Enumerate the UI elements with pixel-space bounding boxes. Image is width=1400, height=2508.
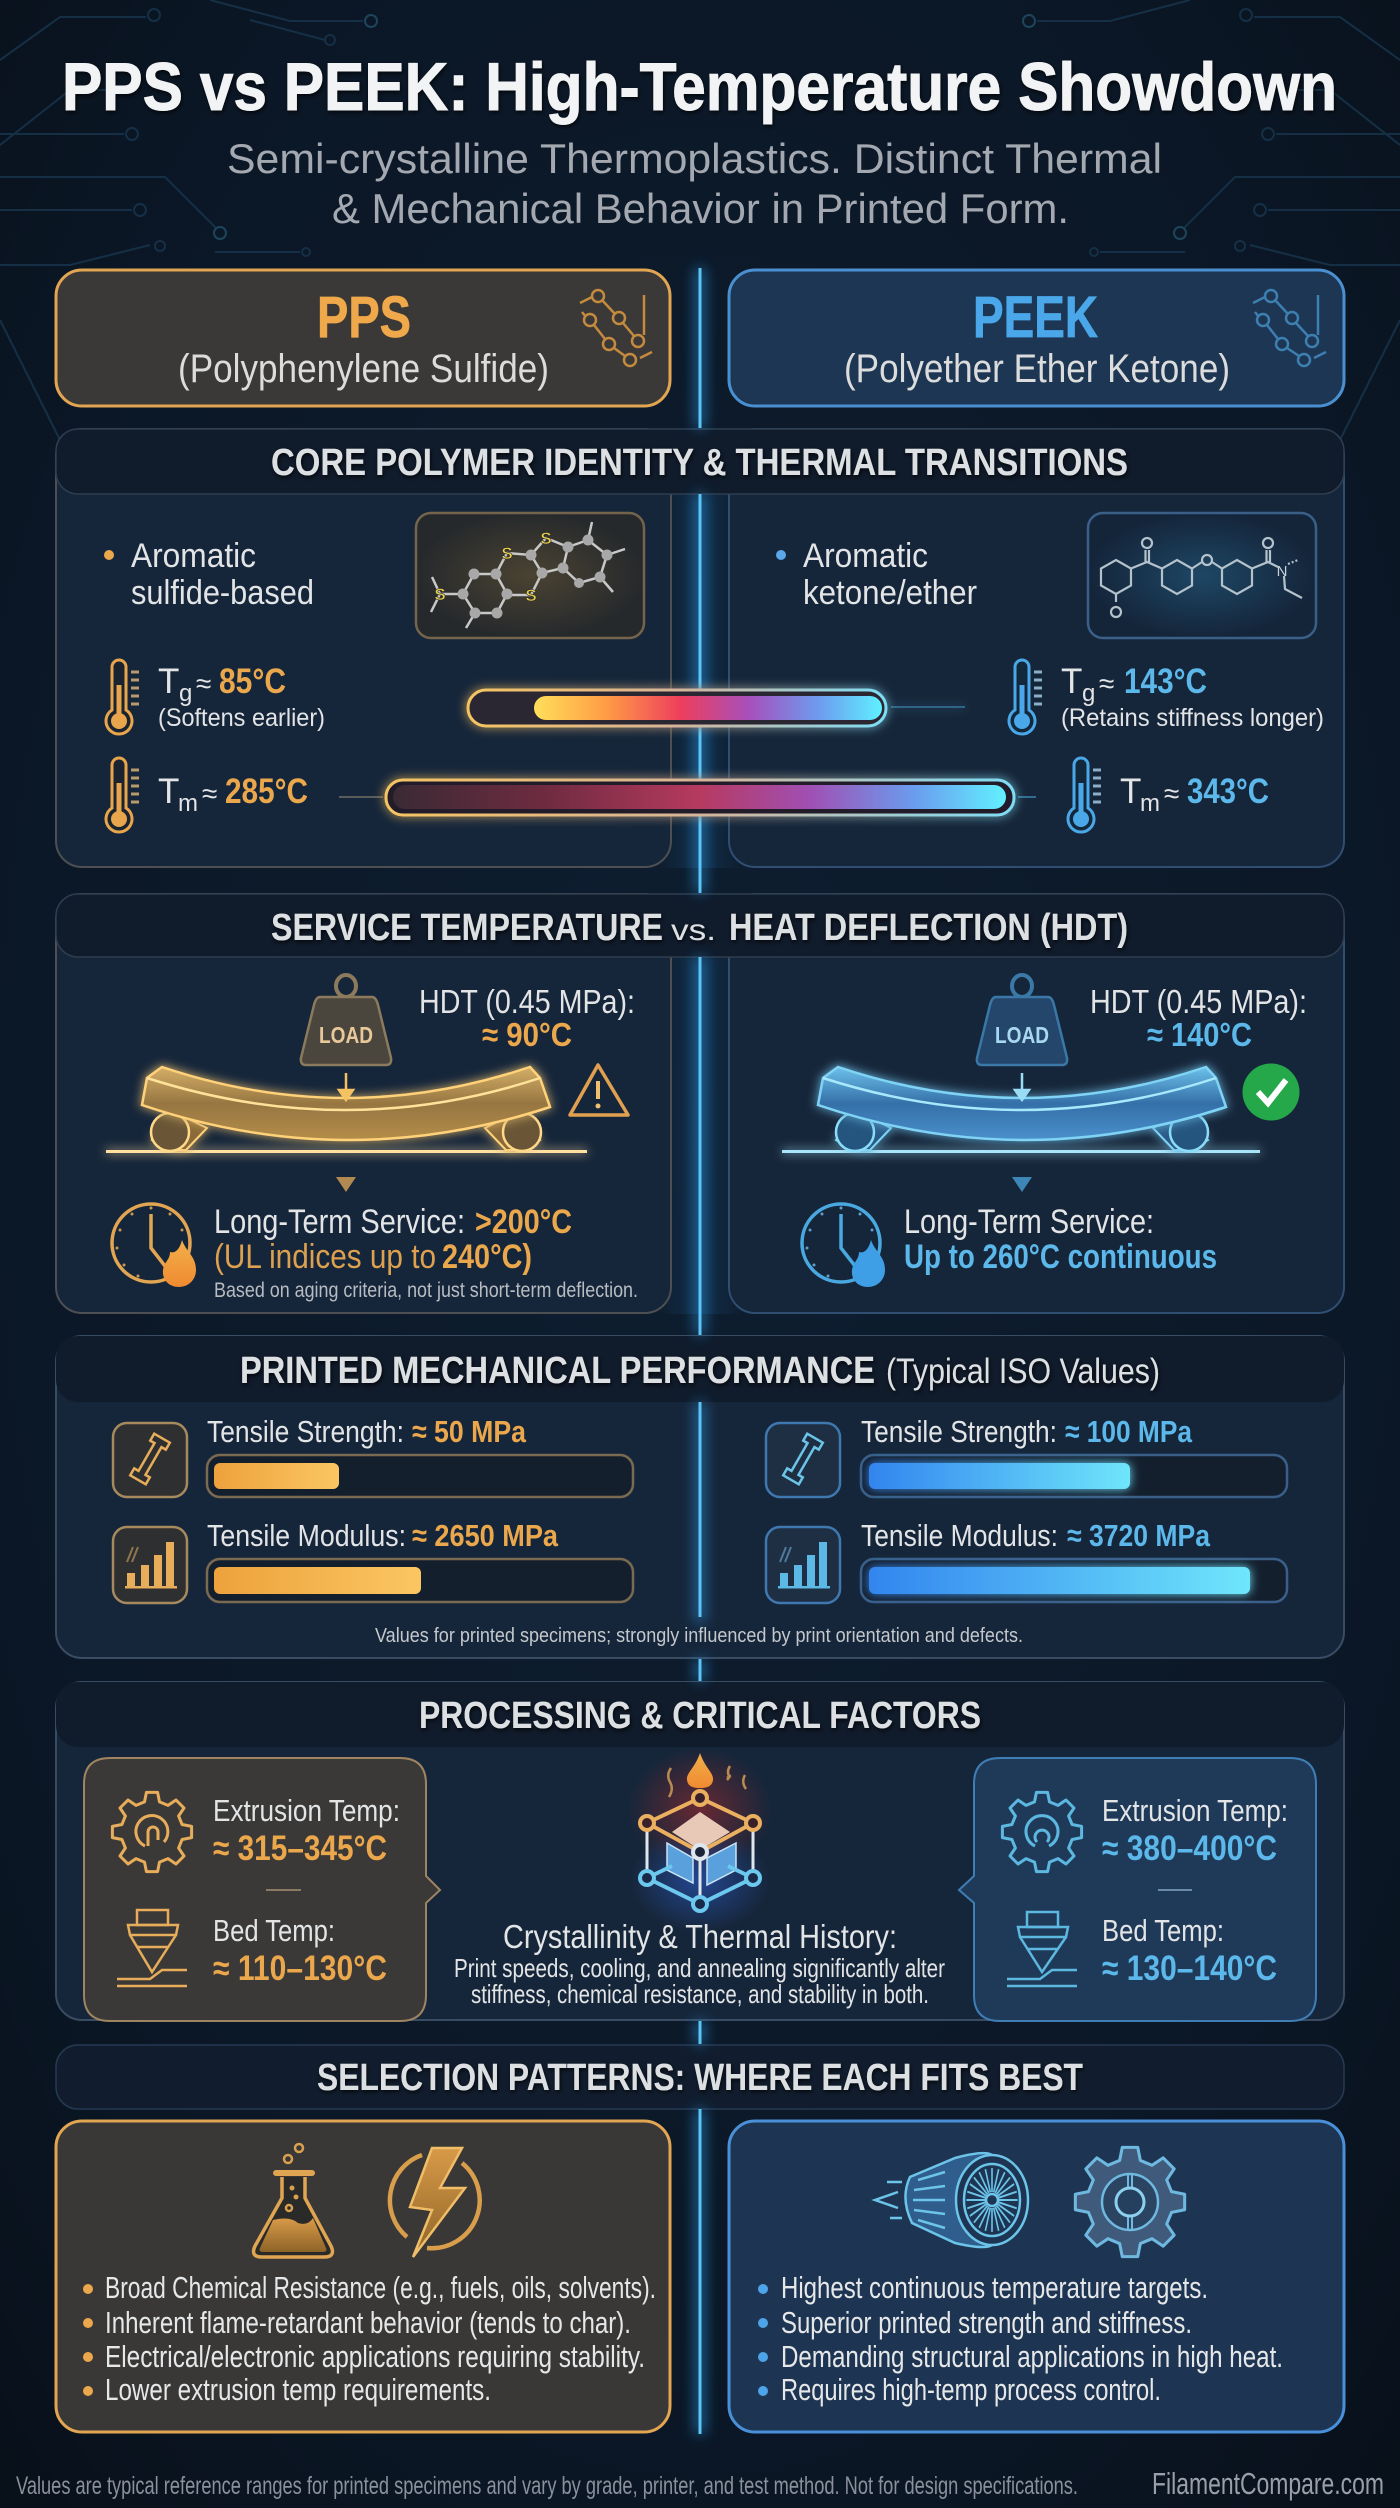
subtitle: & Mechanical Behavior in Printed Form. [332, 185, 1069, 232]
panel: processing [56, 1682, 1344, 2020]
icon: PPS tensile specimen [113, 1423, 187, 1497]
PEEK molecule box: N [1277, 563, 1287, 580]
heading: PROCESSING & CRITICAL FACTORS [419, 1695, 981, 1737]
subtitle: Semi-crystalline Thermoplastics. Distinct Thermal [227, 135, 1162, 182]
PEEK identity text: ketone/ether [803, 574, 977, 612]
icon: PPS clock flame [112, 1204, 196, 1287]
icon: PEEK nozzle [1007, 1912, 1077, 1986]
PEEK bullet list: Superior printed strength and stiffness. [781, 2305, 1192, 2340]
center divider [696, 268, 704, 2434]
arrow: PPS down pointer [336, 1177, 356, 1192]
Tm PPS label: m [178, 790, 198, 817]
PEEK service text: Up to 260°C continuous [904, 1238, 1217, 1276]
HDT PEEK text [1090, 983, 1307, 1053]
heading band [56, 894, 1344, 957]
Tm PEEK label: 343°C [1187, 772, 1269, 811]
icon: PEEK clock flame [802, 1204, 885, 1287]
PPS service text: (UL indices up to [214, 1238, 436, 1276]
heading: HEAT DEFLECTION (HDT) [729, 907, 1128, 949]
icon: warning [570, 1065, 628, 1115]
icon: PPS load weight: LOAD [319, 1022, 373, 1048]
icon: thermometer PPS Tm [106, 758, 139, 832]
PPS name: PPS [317, 285, 411, 350]
PPS molecule box [416, 513, 644, 638]
extrusion temp: Extrusion Temp: [213, 1793, 400, 1828]
icon: PPS modulus bars [113, 1527, 187, 1603]
PEEK tensile modulus [861, 1518, 1287, 1602]
icon: crystal lattice [628, 1748, 772, 1932]
panel: PPS processing callout [84, 1758, 440, 2021]
PPS bullet list: Inherent flame-retardant behavior (tends to char). [105, 2305, 631, 2340]
Tg PPS label: g [179, 680, 192, 707]
PPS molecule box: S [434, 585, 446, 604]
PPS tensile strength: Tensile Strength: [207, 1414, 404, 1449]
PEEK bullet list: Requires high-temp process control. [781, 2372, 1161, 2407]
HDT PPS text: HDT (0.45 MPa): [419, 983, 635, 1020]
icon: PEEK load weight [977, 975, 1067, 1065]
Tm PEEK label: ≈ [1164, 778, 1179, 809]
extrusion temp [213, 1793, 400, 1868]
panel: PPS selection [56, 2121, 670, 2432]
icon: thermometer PPS Tg [106, 660, 139, 734]
PPS identity text: Aromatic [131, 537, 256, 575]
Tg PPS label [158, 662, 325, 732]
arrow: load [1015, 1073, 1029, 1100]
panel: service temperature [56, 893, 1344, 1314]
extrusion temp [1102, 1793, 1288, 1868]
extrusion temp: ≈ 380–400°C [1102, 1829, 1277, 1868]
heading: SERVICE TEMPERATURE [271, 907, 663, 949]
heading: CORE POLYMER IDENTITY & THERMAL TRANSITIONS [271, 442, 1128, 484]
Tm PEEK label: T [1120, 772, 1141, 811]
PPS bullet list: Lower extrusion temp requirements. [105, 2372, 491, 2407]
Tm PEEK label: m [1140, 790, 1160, 817]
panel: core polymer identity [56, 429, 1344, 867]
PEEK tensile strength [861, 1414, 1287, 1497]
bar: Tm span [339, 780, 1036, 815]
Tg PEEK label: 143°C [1124, 662, 1207, 701]
PPS molecule box: S [525, 586, 537, 605]
Tg PEEK label: (Retains stiffness longer) [1061, 704, 1324, 732]
crystallinity text: stiffness, chemical resistance, and stability in both. [471, 1979, 929, 2009]
PPS bullet list [83, 2270, 656, 2407]
PPS tensile strength [207, 1414, 633, 1497]
bed temp [213, 1913, 387, 1988]
Tm PPS label [158, 772, 308, 817]
PEEK service text: Long-Term Service: [904, 1203, 1154, 1241]
Tg PEEK label: ≈ [1099, 668, 1114, 699]
PEEK tensile modulus: Tensile Modulus: [861, 1518, 1058, 1553]
PPS tensile modulus: ≈ 2650 MPa [412, 1518, 559, 1553]
crystallinity text: Crystallinity & Thermal History: [503, 1918, 897, 1955]
circuit traces right [1023, 0, 1400, 440]
heading band [56, 429, 1344, 494]
icon: turbine [875, 2153, 1028, 2247]
extrusion temp: Extrusion Temp: [1102, 1793, 1288, 1828]
bar: Tg span [468, 690, 965, 726]
bed temp [1102, 1913, 1277, 1988]
PPS tensile modulus: Tensile Modulus: [207, 1518, 406, 1553]
PPS identity text [104, 537, 314, 612]
icon: flask [254, 2144, 332, 2257]
PPS tensile modulus [207, 1518, 633, 1602]
arrow: PEEK down pointer [1012, 1177, 1032, 1192]
bed temp: ≈ 130–140°C [1102, 1949, 1277, 1988]
PEEK full name: (Polyether Ether Ketone) [844, 347, 1230, 391]
PPS service text: Long-Term Service: [214, 1203, 465, 1241]
HDT PPS text [419, 983, 635, 1053]
Tg PEEK label: T [1061, 662, 1082, 701]
Tg PPS label: T [158, 662, 179, 701]
panel: PEEK header [729, 270, 1344, 406]
PPS service text: 240°C) [442, 1238, 532, 1276]
Tm PEEK label [1120, 772, 1269, 817]
icon: PEEK gear [1002, 1792, 1082, 1872]
panel: printed mechanical performance [56, 1336, 1344, 1658]
bed temp: Bed Temp: [213, 1913, 335, 1948]
icon: PEEK large gear [1075, 2147, 1185, 2257]
heading: SELECTION PATTERNS: WHERE EACH FITS BEST [317, 2057, 1083, 2099]
icon: PPS gear [112, 1792, 192, 1872]
PPS service text [214, 1203, 638, 1302]
Tg PPS label: (Softens earlier) [158, 704, 325, 732]
Tg PPS label: ≈ [196, 668, 211, 699]
PPS bullet list: Broad Chemical Resistance (e.g., fuels, oils, solvents). [105, 2270, 656, 2305]
PEEK tensile modulus: ≈ 3720 MPa [1067, 1518, 1211, 1553]
heading: PRINTED MECHANICAL PERFORMANCE [240, 1350, 875, 1392]
PEEK identity text: Aromatic [803, 537, 928, 575]
arrow: load [339, 1073, 353, 1100]
Tm PPS label: ≈ [202, 778, 217, 809]
Tg PEEK label [1061, 662, 1324, 732]
PEEK identity text [776, 537, 977, 612]
panel: PEEK processing callout [959, 1758, 1316, 2021]
icon: PPS load weight [301, 975, 391, 1065]
PEEK tensile strength: Tensile Strength: [861, 1414, 1057, 1449]
icon: PEEK tensile specimen [766, 1423, 840, 1497]
bed temp: Bed Temp: [1102, 1913, 1224, 1948]
icon: PEEK chain [1253, 290, 1326, 366]
PPS identity text: sulfide-based [131, 574, 314, 612]
PPS service text: >200°C [475, 1203, 572, 1241]
bed temp: ≈ 110–130°C [213, 1949, 387, 1988]
mechanical note: Values for printed specimens; strongly influenced by print orientation and defects. [375, 1625, 1023, 1647]
heading band [56, 1682, 1344, 1747]
icon: PEEK modulus bars [766, 1527, 840, 1603]
extrusion temp: ≈ 315–345°C [213, 1829, 387, 1868]
icon: thermometer PEEK Tm [1068, 758, 1101, 832]
PPS tensile strength: ≈ 50 MPa [412, 1414, 527, 1449]
icon: check badge [1242, 1064, 1300, 1120]
circuit traces left [0, 0, 377, 440]
subtitle [227, 135, 1162, 232]
crystallinity text: Print speeds, cooling, and annealing significantly alter [454, 1953, 945, 1983]
PPS bending beam [106, 1065, 628, 1153]
PPS molecule box: S [540, 529, 552, 548]
PEEK molecule box [1088, 513, 1316, 638]
Tm PPS label: 285°C [225, 772, 308, 811]
PPS bullet list: Electrical/electronic applications requiring stability. [105, 2339, 645, 2374]
HDT PPS text: ≈ 90°C [482, 1016, 572, 1053]
HDT PEEK text: HDT (0.45 MPa): [1090, 983, 1307, 1020]
heading [271, 907, 1128, 949]
PEEK bullet list [758, 2270, 1283, 2407]
PPS molecule box: S [501, 544, 513, 563]
PEEK bending beam [782, 1064, 1300, 1153]
PPS service text: Based on aging criteria, not just short-term deflection. [214, 1279, 638, 1302]
panel backs: section 1 gap [660, 428, 740, 868]
PEEK service text [904, 1203, 1217, 1276]
PPS full name: (Polyphenylene Sulfide) [178, 347, 549, 391]
icon: PEEK load weight: LOAD [995, 1022, 1049, 1048]
Tm PPS label: T [158, 772, 179, 811]
heading band [56, 1336, 1344, 1402]
heading: vs. [671, 914, 716, 947]
HDT PEEK text: ≈ 140°C [1147, 1016, 1252, 1053]
Tg PEEK label: g [1082, 680, 1095, 707]
PEEK name: PEEK [973, 285, 1098, 350]
panel: PEEK selection [729, 2121, 1344, 2432]
Tg PPS label: 85°C [219, 662, 286, 701]
icon: thermometer PEEK Tg [1009, 660, 1042, 734]
PEEK bullet list: Highest continuous temperature targets. [781, 2270, 1208, 2305]
PEEK tensile strength: ≈ 100 MPa [1065, 1414, 1193, 1449]
icon: PPS nozzle [117, 1910, 187, 1986]
heading: (Typical ISO Values) [886, 1352, 1160, 1391]
icon: PPS chain [580, 290, 652, 366]
panel: PPS header [56, 270, 670, 406]
icon: lightning bolt [390, 2148, 480, 2257]
panel: selection patterns heading [56, 2045, 1344, 2109]
crystallinity text [454, 1918, 945, 2009]
